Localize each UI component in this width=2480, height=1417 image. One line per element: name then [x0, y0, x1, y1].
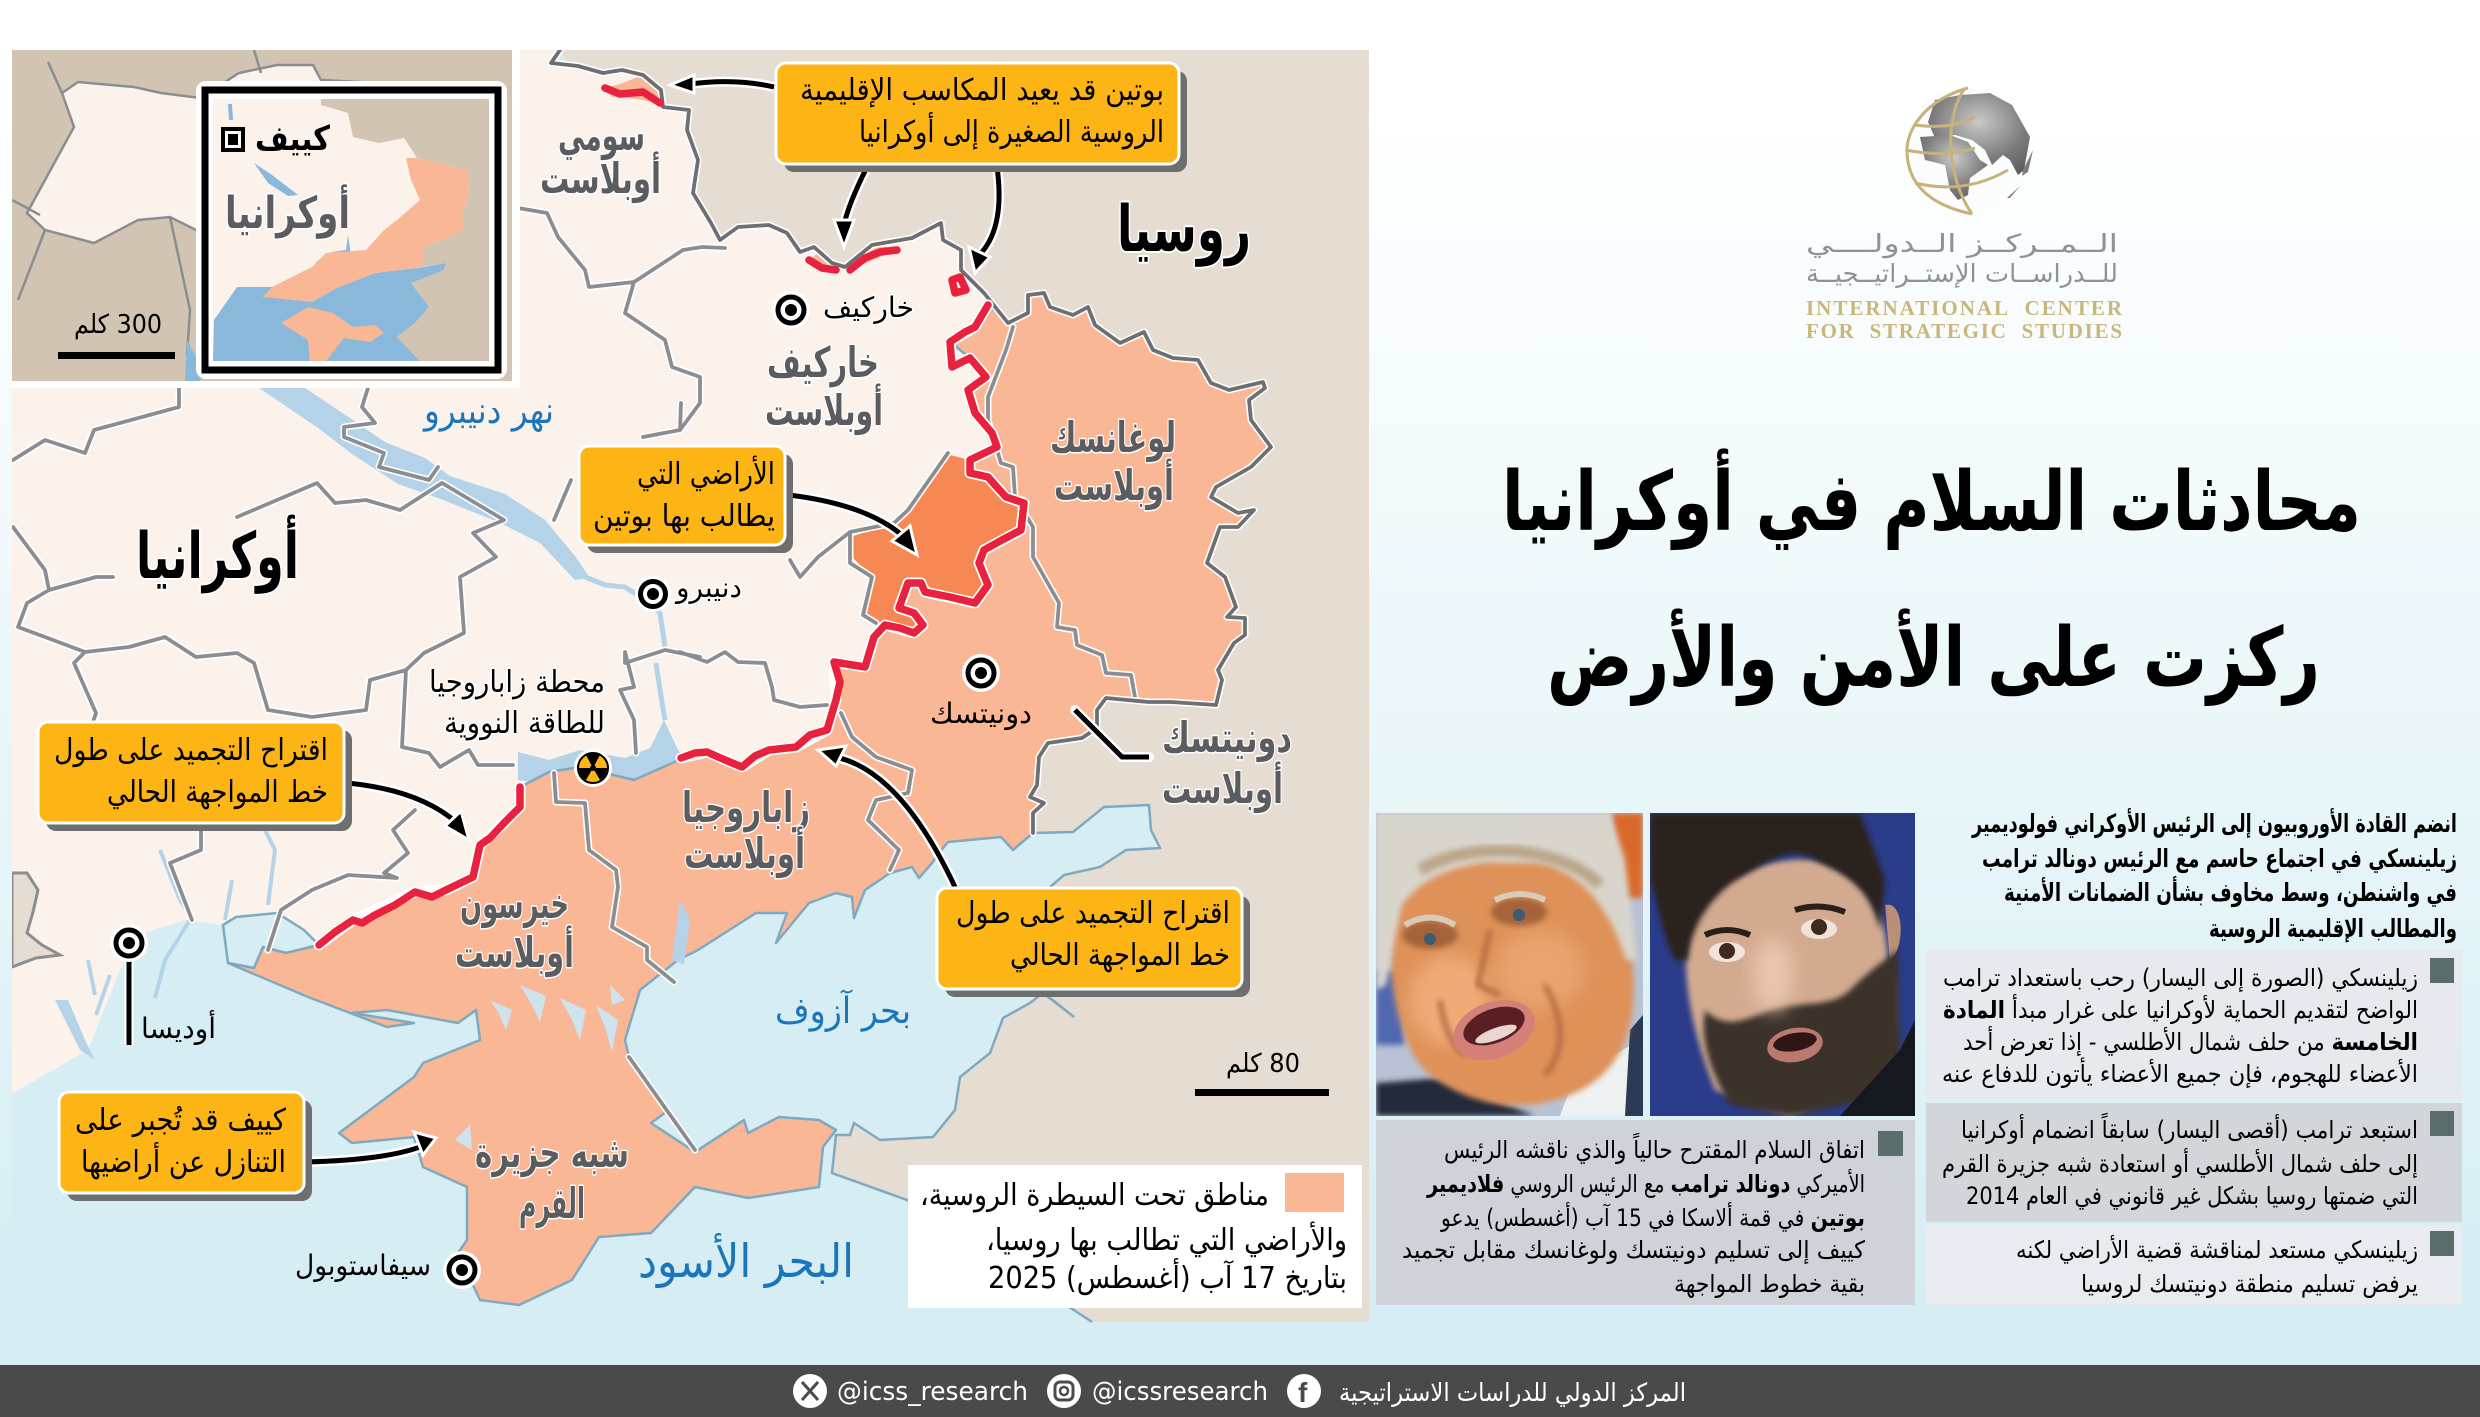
logo: Arabic name: [1806, 229, 2118, 288]
callout: Kyiv may be forced: التنازل عن أراضيها: [81, 1141, 286, 1180]
panel: peace deal text: [1376, 1120, 1915, 1305]
callout: claimed land: يطالب بها بوتين: [593, 499, 775, 534]
label: Crimea: القرم: [519, 1179, 585, 1229]
legend: مناطق تحت السيطرة الروسية،: [920, 1178, 1269, 1213]
label: Russia: روسيا: [1117, 193, 1251, 267]
label: Kharkiv oblast: أوبلاست: [765, 383, 883, 436]
photo: Zelensky: [1650, 813, 1915, 1116]
map: small Sumy and Kharkiv border holdings: [605, 75, 897, 270]
scale bar: 300 km: [58, 310, 175, 359]
arrow: to Kharkiv east: [969, 167, 999, 273]
label: Sumy oblast: سومي: [558, 111, 645, 161]
icon: Kyiv: [221, 127, 245, 152]
label: Kyiv: كييف: [255, 119, 330, 159]
label: Sumy oblast: [541, 132, 660, 204]
callout: freeze west: اقتراح التجميد على طول: [54, 733, 328, 768]
arrow: to eastern front line: [818, 746, 955, 887]
label: Kharkiv oblast: خاركيف: [767, 338, 879, 387]
logo: globe: [1905, 88, 2033, 214]
logo: English name: INTERNATIONAL CENTER: [1806, 296, 2123, 320]
icon: facebook: [1287, 1374, 1321, 1408]
map: Russia land: [560, 50, 1369, 1322]
logo: Arabic name: للــدراســات الإستــراتيــجيــة: [1806, 259, 2118, 288]
panel: locator inset: [12, 50, 520, 388]
arrow: to claimed land: [789, 495, 917, 555]
panel: bullet Trump NATO: التي ضمتها روسيا بشكل غير قانوني في العام 2014: [1966, 1182, 2418, 1210]
footer: instagram handle: @icssresearch: [1092, 1377, 1268, 1407]
label: Zaporizhzhia nuclear plant: للطاقة النووية: [444, 706, 605, 741]
label: Black Sea: البحر الأسود: [638, 1232, 854, 1289]
map: Russia-Ukraine border: [551, 50, 1271, 833]
map: territory claimed by Putin: [850, 455, 1024, 633]
panel: bullet Zelensky protection: الخامسة من حلف شمال الأطلسي - إذا تعرض أحد: [1963, 1026, 2418, 1057]
label: Kherson oblast: أوبلاست: [455, 925, 574, 978]
scale bar: 80 km: [1195, 1049, 1329, 1096]
icon: facebook: f: [1298, 1377, 1308, 1408]
callout: claimed land: الأراضي التي: [637, 454, 775, 492]
panel: bullet Zelensky protection: الأعضاء للهجوم، فإن جميع الأعضاء يأتون للدفاع عنه: [1942, 1057, 2418, 1089]
label: Zaporizhzhia oblast: زاباروجيا: [682, 783, 810, 833]
city: Donetsk: [930, 654, 1032, 730]
footer: organisation name: المركز الدولي للدراسات الاستراتيجية: [1339, 1378, 1686, 1408]
label: Kherson oblast: خيرسون: [460, 879, 569, 929]
logo: Arabic name: الــمــركــز الــدولــــي: [1806, 229, 2118, 259]
arrow: to Sumy: [670, 75, 774, 93]
label: Kharkiv oblast: [765, 338, 883, 436]
callout: freeze east: خط المواجهة الحالي: [1010, 938, 1230, 973]
city: Kharkiv: [772, 291, 914, 329]
label: Crimea: شبه جزيرة: [475, 1128, 629, 1178]
panel: peace deal text: بقية خطوط المواجهة: [1674, 1270, 1865, 1298]
callout: freeze east: اقتراح التجميد على طول: [956, 896, 1230, 931]
panel: peace deal text: بوتين في قمة ألاسكا في 15 آب (أغسطس) يدعو: [1440, 1202, 1865, 1232]
label: Crimea: [475, 1140, 628, 1230]
panel: bullet Zelensky territory: [1926, 1225, 2462, 1305]
label: Ukraine: أوكرانيا: [136, 514, 299, 594]
panel: map: [12, 50, 1369, 1365]
panel: bullet Zelensky territory: يرفض تسليم منطقة دونيتسك لروسيا: [2081, 1270, 2418, 1298]
arrow: to Kharkiv north: [834, 167, 867, 247]
legend: والأراضي التي تطالب بها روسيا،: [986, 1220, 1347, 1258]
logo: English name: FOR STRATEGIC STUDIES: [1806, 319, 2122, 343]
panel: bullet Zelensky protection: زيلينسكي (الصورة إلى اليسار) رحب باستعداد ترامب: [1943, 964, 2418, 993]
label: Ukraine in inset: أوكرانيا: [225, 184, 350, 239]
city: Sevastopol: [295, 1249, 481, 1289]
label: Luhansk oblast: لوغانسك: [1050, 413, 1176, 463]
map: Moldova: [12, 873, 60, 967]
legend: بتاريخ 17 آب (أغسطس) 2025: [988, 1257, 1347, 1296]
label: Zaporizhzhia nuclear plant: [429, 665, 605, 741]
photo: Trump: [1376, 813, 1643, 1116]
label: Donetsk oblast: أوبلاست: [1162, 761, 1283, 814]
map: Ukraine land: [12, 50, 1008, 1093]
label: Kherson oblast: [456, 894, 573, 979]
label: Sea of Azov: بحر آزوف: [775, 988, 911, 1032]
map: Russian-held territory: [228, 293, 1271, 1305]
panel: bullet Zelensky territory: زيلينسكي مستعد لمناقشة قضية الأراضي لكنه: [2016, 1235, 2418, 1264]
city: Sevastopol: سيفاستوبول: [295, 1249, 431, 1282]
panel: peace deal text: كييف إلى تسليم دونيتسك ولوغانسك مقابل تجميد: [1402, 1236, 1866, 1265]
city: Kharkiv: خاركيف: [823, 291, 914, 324]
scale bar: 80 km: 80 كلم: [1226, 1049, 1300, 1079]
callout: small territorial gains: بوتين قد يعيد المكاسب الإقليمية: [800, 73, 1164, 108]
inset: surrounding countries: [12, 50, 512, 381]
title: [1502, 448, 2361, 707]
callout: small territorial gains: الروسية الصغيرة إلى أوكرانيا: [859, 111, 1164, 150]
label: Donetsk oblast: دونيتسك: [1162, 713, 1292, 763]
city: Odesa: أوديسا: [141, 1009, 216, 1045]
panel: bullet Trump NATO: استبعد ترامب (أقصى اليسار) سابقاً انضمام أوكرانيا: [1961, 1113, 2418, 1144]
callout: freeze east: [937, 888, 1250, 997]
panel: bullet Zelensky protection: الواضح لتقديم الحماية لأوكرانيا على غرار مبدأ المادة: [1943, 994, 2418, 1024]
legend: [908, 1165, 1362, 1308]
label: Sumy oblast: أوبلاست: [540, 151, 661, 204]
callout: freeze west: خط المواجهة الحالي: [107, 775, 328, 810]
map: Russian coast: [832, 805, 1160, 1322]
scale bar: 300 km: 300 كلم: [74, 310, 162, 340]
map: water in Syvash and northern Crimea: [455, 900, 690, 1150]
label: Donetsk oblast: [1162, 713, 1292, 814]
callout: Kyiv may be forced: [59, 1092, 312, 1201]
icon: instagram: [1047, 1374, 1081, 1408]
label: Dnipro river: نهر دنيبرو: [422, 391, 554, 432]
leader line: Donetsk oblast: [1075, 710, 1149, 757]
city: Dnipro: دنيبرو: [674, 571, 742, 604]
inset: Russia: [321, 99, 489, 361]
label: Zaporizhzhia oblast: [682, 783, 810, 879]
map: front line in red: [319, 88, 1024, 945]
callout: claimed land: [579, 446, 793, 553]
map: estuary near Kherson: [223, 913, 319, 968]
arrow: to Crimea: [304, 1132, 436, 1162]
icon: nuclear plant: [574, 749, 612, 787]
callout: freeze west: [38, 722, 352, 831]
panel: bullet Zelensky protection: [1926, 950, 2462, 1099]
label: Zaporizhzhia nuclear plant: محطة زاباروجيا: [429, 665, 605, 700]
arrow: to western front line: [347, 783, 469, 840]
label: Luhansk oblast: أوبلاست: [1054, 458, 1174, 511]
footer: [0, 1365, 2480, 1417]
icon: X: [793, 1374, 827, 1408]
panel: bullet Trump NATO: إلى حلف شمال الأطلسي أو استعادة شبه جزيرة القرم: [1942, 1148, 2418, 1179]
map: oblast borders: [13, 208, 1135, 1150]
panel: peace deal text: الأميركي دونالد ترامب مع الرئيس الروسي فلاديمير: [1426, 1169, 1865, 1198]
city: Odesa: [110, 924, 216, 1045]
inset: outer Ukraine shape: [27, 65, 420, 300]
panel: bullet Trump NATO: [1926, 1103, 2462, 1222]
map: Dnipro river and reservoirs: [55, 388, 690, 1060]
inset: seas: [213, 263, 446, 361]
label: Zaporizhzhia oblast: أوبلاست: [684, 826, 805, 879]
label: Luhansk oblast: [1050, 413, 1176, 511]
callout: small territorial gains: [776, 63, 1187, 172]
footer: X handle: @icss_research: [837, 1377, 1028, 1407]
panel: peace deal text: اتفاق السلام المقترح حالياً والذي ناقشه الرئيس: [1444, 1133, 1865, 1164]
city: Dnipro: [635, 576, 742, 612]
text block: intro: [1971, 808, 2457, 944]
city: Donetsk: دونيتسك: [930, 697, 1032, 730]
callout: Kyiv may be forced: كييف قد تُجبر على: [75, 1103, 287, 1138]
logo: English name: [1806, 296, 2123, 343]
inset: Ukraine: [213, 99, 489, 361]
inset: Russian-held areas: [263, 158, 469, 302]
